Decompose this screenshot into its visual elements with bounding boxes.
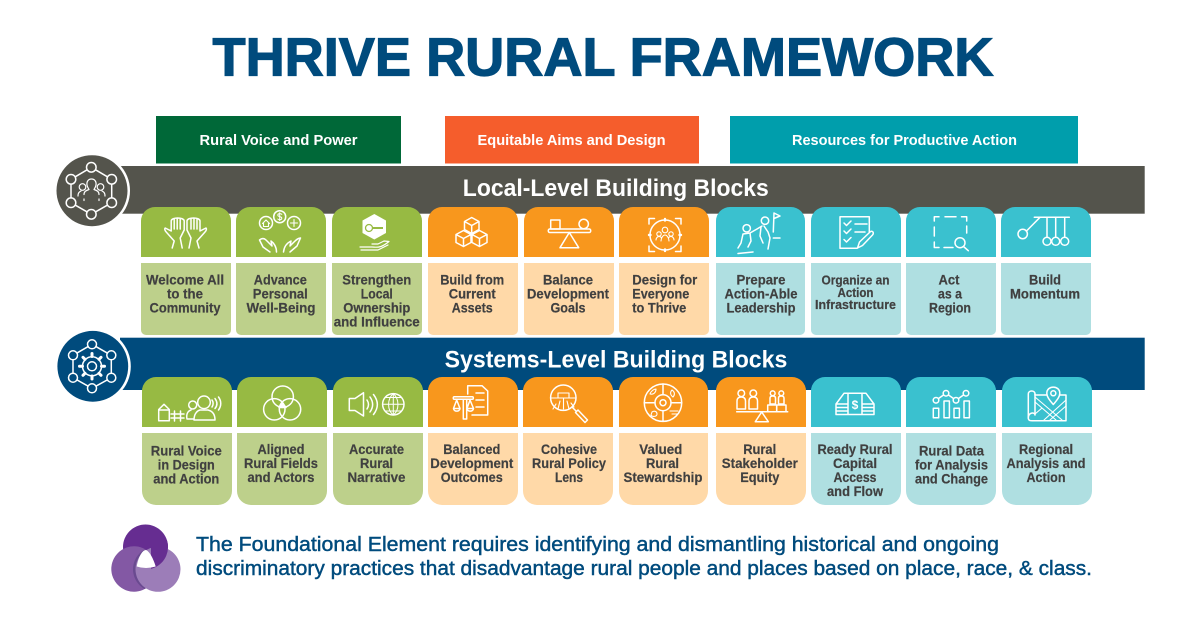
card: Regional Analysis and Action: Regional [1019, 442, 1073, 457]
pillar heading: Rural Voice and Power: Rural Voice and Power [200, 132, 358, 149]
icon: purple foundational element logo [111, 524, 180, 592]
card: Ready Rural Capital Access and Flow: Ready Rural [818, 442, 892, 457]
card: Design for Everyone to Thrive: to Thrive [632, 300, 687, 316]
card: Valued Rural Stewardship: Rural [646, 456, 679, 471]
card: Rural Stakeholder Equity [716, 377, 806, 505]
card: Balance Development Goals [524, 207, 614, 335]
card: Accurate Rural Narrative: Accurate [349, 442, 404, 457]
band: Local-Level Building Blocks: Local-Level Building Blocks [463, 175, 769, 202]
card: Aligned Rural Fields and Actors: Aligned [258, 442, 304, 457]
icon: region selection with magnifier [934, 217, 968, 251]
icon: stack of money: $ [852, 398, 859, 412]
icon: scales and document [453, 386, 488, 419]
card: Balanced Development Outcomes: Outcomes [441, 470, 503, 485]
card: Rural Stakeholder Equity: Rural [743, 442, 776, 457]
foundational element statement: The Foundational Element requires identifying and dismantling historical and ongoing [196, 534, 999, 556]
card: Cohesive Rural Policy Lens: Lens [555, 470, 583, 485]
card: Rural Voice in Design and Action [142, 377, 232, 505]
card: Balanced Development Outcomes [428, 377, 518, 505]
card: Regional Analysis and Action [1002, 377, 1092, 505]
icon: speaker and globe [349, 393, 404, 416]
card: Welcome All to the Community: to the [167, 286, 203, 302]
card: Rural Voice in Design and Action: Rural Voice [151, 444, 222, 458]
card: Cohesive Rural Policy Lens: Rural Policy [532, 456, 606, 471]
card: Prepare Action-Able Leadership: Action-Able [724, 286, 798, 302]
card: Accurate Rural Narrative: Narrative [348, 470, 406, 485]
card: Rural Data for Analysis and Change: Rural Data [919, 444, 984, 458]
card: Balance Development Goals: Development [527, 286, 609, 302]
card: Balance Development Goals: Balance [543, 272, 593, 288]
icon: climbers with flag [738, 213, 780, 254]
card: Rural Stakeholder Equity: Equity [740, 470, 780, 485]
card: Aligned Rural Fields and Actors [237, 377, 327, 505]
card: Rural Stakeholder Equity: Stakeholder [722, 456, 799, 471]
card: Rural Voice in Design and Action: in Design [158, 458, 215, 472]
icon: stewardship wheel [644, 384, 682, 421]
card: Welcome All to the Community: Welcome All [146, 272, 224, 288]
card: Design for Everyone to Thrive: Everyone [632, 286, 690, 302]
card: Organize an Action Infrastructure [811, 207, 901, 335]
card: Regional Analysis and Action: Action [1026, 470, 1066, 485]
icon: seesaw balance [548, 219, 591, 248]
card: Valued Rural Stewardship: Stewardship [624, 470, 702, 485]
card: Build from Current Assets: Build from [440, 272, 504, 288]
card: Aligned Rural Fields and Actors: and Actors [248, 470, 314, 485]
card: Build from Current Assets: Assets [452, 300, 493, 316]
foundational element statement: discriminatory practices that disadvantage rural people and places based on place, race, & class. [196, 558, 1092, 580]
card: Act as a Region: Act [938, 272, 960, 288]
card: Organize an Action Infrastructure: Infrastructure [815, 298, 896, 312]
card: Build Momentum [1001, 207, 1091, 335]
card: Cohesive Rural Policy Lens [523, 377, 613, 505]
card: Accurate Rural Narrative [333, 377, 423, 505]
card: Strengthen Local Ownership and Influence: Strengthen [342, 272, 411, 288]
pillar heading: Resources for Productive Action: Resources for Productive Action [792, 132, 1017, 149]
icon: systems-level gear network [55, 328, 131, 404]
icon: checklist and pencil [840, 217, 873, 248]
icon: key in hexagon over hand [360, 214, 389, 250]
card: Strengthen Local Ownership and Influence: and Influence [334, 314, 420, 330]
card: Organize an Action Infrastructure: Action [838, 286, 874, 300]
pillar heading: Equitable Aims and Design [445, 116, 699, 164]
icon: house, fence and speakers [159, 396, 221, 421]
card: Strengthen Local Ownership and Influence: Ownership [343, 300, 410, 316]
card: Design for Everyone to Thrive [619, 207, 709, 335]
icon: Newton's cradle [1018, 217, 1069, 245]
card: Design for Everyone to Thrive: Design for [632, 272, 698, 288]
card: Act as a Region [906, 207, 996, 335]
card: Strengthen Local Ownership and Influence [332, 207, 422, 335]
card: Prepare Action-Able Leadership: Leadership [726, 300, 796, 316]
icon: well-being coins and hands [260, 211, 300, 252]
icon: open hands [165, 218, 206, 248]
card: Prepare Action-Able Leadership: Prepare [736, 272, 786, 288]
card: Strengthen Local Ownership and Influence: Local [361, 286, 393, 302]
pillar heading: Rural Voice and Power [156, 116, 401, 164]
card: Regional Analysis and Action: Analysis and [1006, 456, 1086, 471]
pillar heading: Equitable Aims and Design: Equitable Aims and Design [478, 132, 666, 149]
card: Build from Current Assets [428, 207, 518, 335]
icon: stakeholders on a balance [737, 390, 788, 422]
band: Systems-Level Building Blocks: Systems-Level Building Blocks [445, 347, 787, 374]
card: Aligned Rural Fields and Actors: Rural Fields [244, 456, 318, 471]
card: Prepare Action-Able Leadership [716, 207, 805, 335]
card: Act as a Region: as a [938, 286, 962, 302]
card: Welcome All to the Community: Community [150, 300, 221, 316]
card: Advance Personal Well-Being: Advance [254, 272, 307, 288]
card: Balance Development Goals: Goals [550, 300, 586, 316]
card: Accurate Rural Narrative: Rural [360, 456, 393, 471]
card: Rural Voice in Design and Action: and Action [153, 472, 219, 486]
card: Balanced Development Outcomes: Balanced [443, 442, 500, 457]
card: Organize an Action Infrastructure: Organize an [822, 274, 890, 288]
card: Advance Personal Well-Being: Personal [253, 286, 308, 302]
icon: bar and line chart [933, 390, 969, 418]
band: Local-Level Building Blocks [120, 166, 1145, 214]
card: Advance Personal Well-Being [236, 207, 326, 335]
card: Welcome All to the Community [141, 207, 231, 335]
icon: people in focus ring [649, 218, 681, 252]
icon: local-level community network [54, 153, 130, 229]
pillar heading: Resources for Productive Action [730, 116, 1078, 164]
icon: magnifier over rural scene [551, 385, 588, 422]
card: Cohesive Rural Policy Lens: Cohesive [541, 442, 597, 457]
card: Ready Rural Capital Access and Flow: Access [834, 470, 876, 485]
card: Valued Rural Stewardship: Valued [639, 442, 682, 457]
icon: map with pin [1028, 387, 1066, 421]
foundational element statement [196, 534, 1092, 580]
card: Ready Rural Capital Access and Flow: and Flow [827, 484, 883, 499]
card: Valued Rural Stewardship [619, 377, 708, 505]
icon: stacked cubes [456, 218, 487, 246]
card: Rural Data for Analysis and Change: for Analysis [915, 458, 988, 472]
card: Rural Data for Analysis and Change [906, 377, 996, 505]
icon: three-circle venn [264, 386, 301, 420]
card: Build Momentum: Momentum [1010, 286, 1080, 302]
card: Balanced Development Outcomes: Development [430, 456, 514, 471]
title: THRIVE RURAL FRAMEWORK [212, 28, 994, 87]
card: Ready Rural Capital Access and Flow [811, 377, 901, 505]
card: Ready Rural Capital Access and Flow: Capital [833, 456, 877, 471]
card: Act as a Region: Region [929, 300, 971, 316]
card: Build from Current Assets: Current [449, 286, 496, 302]
card: Advance Personal Well-Being: Well-Being [246, 300, 316, 316]
card: Rural Data for Analysis and Change: and Change [915, 472, 988, 486]
band: Systems-Level Building Blocks [120, 338, 1145, 390]
card: Build Momentum: Build [1029, 272, 1061, 288]
